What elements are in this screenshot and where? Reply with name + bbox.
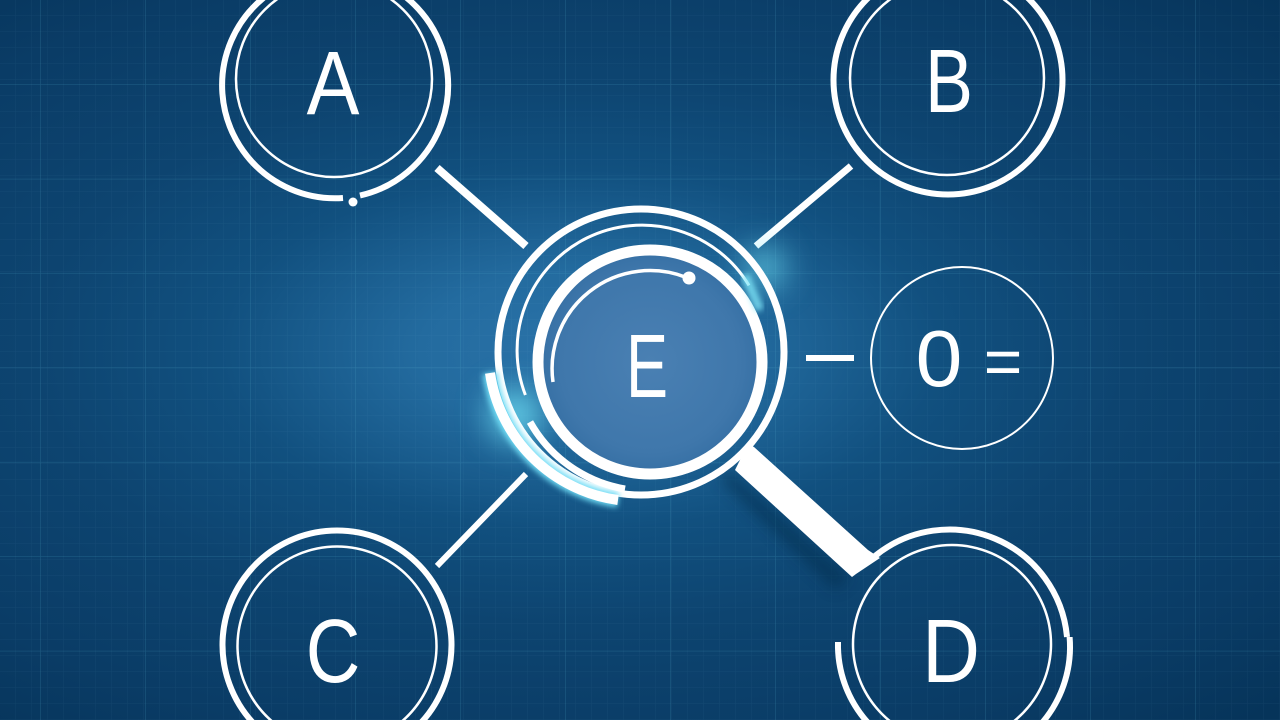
magnifying glass [489, 209, 880, 590]
thin ring arc [517, 225, 749, 395]
node D: D [922, 602, 980, 702]
node C: C [306, 601, 360, 701]
node B [834, 0, 1062, 194]
thin arc with dot [552, 271, 696, 382]
lens glow [489, 248, 785, 441]
node A [222, 0, 448, 207]
connector: B to lens [756, 166, 851, 246]
node 0 with equals sign [871, 267, 1053, 449]
connector: A to lens [437, 168, 526, 246]
connector: C to lens [437, 474, 526, 566]
node 0 with equals sign: 0 [916, 315, 962, 404]
thick inner ring [538, 250, 762, 474]
lower-left glow arcs [490, 373, 625, 500]
cyan glint between rings [745, 275, 760, 310]
outer ring [498, 209, 784, 495]
letter E: E [626, 317, 668, 417]
handle shadow [720, 470, 850, 590]
node C [219, 527, 454, 720]
connector: 0 to lens [806, 355, 854, 361]
lens glass [542, 254, 758, 470]
node 0 with equals sign: = [984, 324, 1022, 398]
handle [735, 444, 880, 577]
node D [835, 530, 1073, 720]
node A: A [307, 32, 360, 133]
node B: B [925, 31, 973, 132]
